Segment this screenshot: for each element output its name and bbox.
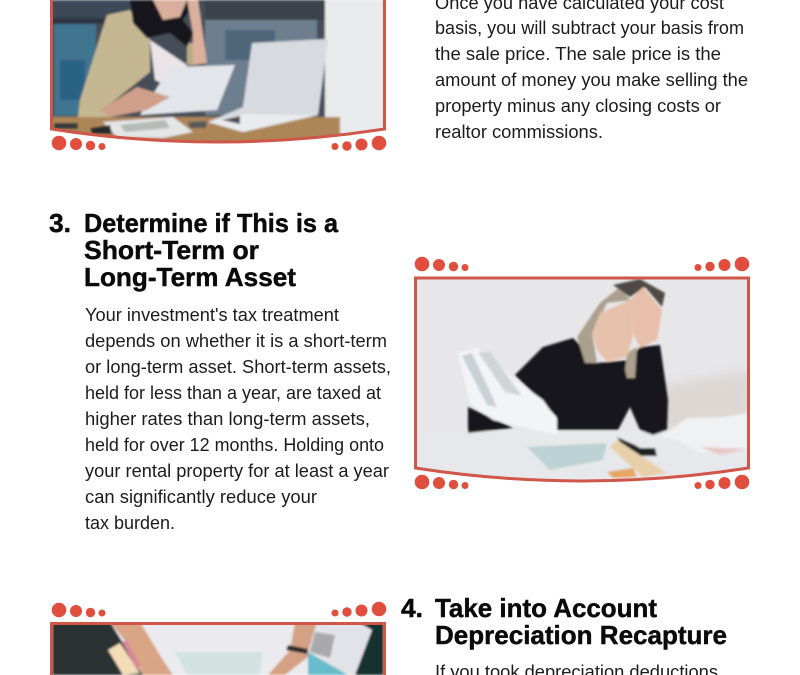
heading: step 3: 3. (49, 208, 71, 238)
text block: step 2 body: the sale price. The sale price is the (435, 44, 721, 64)
text block: step 3 body: held for over 12 months. Holding onto (85, 435, 384, 455)
heading: step 4 (401, 593, 727, 650)
text block: step 3 body: Your investment's tax treatment (85, 305, 339, 325)
decoration: dots above photo 4 (52, 602, 386, 617)
text block: step 3 body: held for less than a year, are taxed at (85, 383, 381, 403)
text block: step 3 body: or long-term asset. Short-term assets, (85, 357, 391, 377)
heading: step 4: 4. (401, 593, 423, 623)
text block: step 2 body: basis, you will subtract your basis from (435, 18, 744, 38)
heading: step 3: Long-Term Asset (84, 262, 296, 292)
text block: step 3 body: tax burden. (85, 513, 175, 533)
decoration: dots above photo 3 (415, 257, 749, 271)
text block: step 3 body: can significantly reduce your (85, 487, 317, 507)
heading: step 3: Short-Term or (84, 235, 259, 265)
photo: frustrated woman at desk with papers (414, 277, 750, 487)
heading: step 4: Take into Account (435, 593, 657, 623)
decoration: dots below photo 3 (415, 475, 749, 489)
text block: step 2 body: realtor commissions. (435, 122, 603, 142)
text block: step 3 body (85, 305, 391, 533)
text block: step 2 body: property minus any closing costs or (435, 96, 721, 116)
text block: step 3 body: higher rates than long-term assets, (85, 409, 370, 429)
heading: step 4: Depreciation Recapture (435, 620, 727, 650)
heading: step 3: Determine if This is a (84, 208, 339, 238)
photo: hands over tax form on desk (50, 622, 386, 675)
heading: step 3 (49, 208, 339, 292)
text block: step 2 body: amount of money you make selling the (435, 70, 748, 90)
decoration: dots under photo 1 (52, 136, 386, 151)
text block: step 3 body: depends on whether it is a short-term (85, 331, 387, 351)
photo: woman reviewing papers at laptop (50, 0, 390, 145)
text block: step 3 body: your rental property for at least a year (85, 461, 389, 481)
text block: step 2 body (435, 0, 748, 142)
